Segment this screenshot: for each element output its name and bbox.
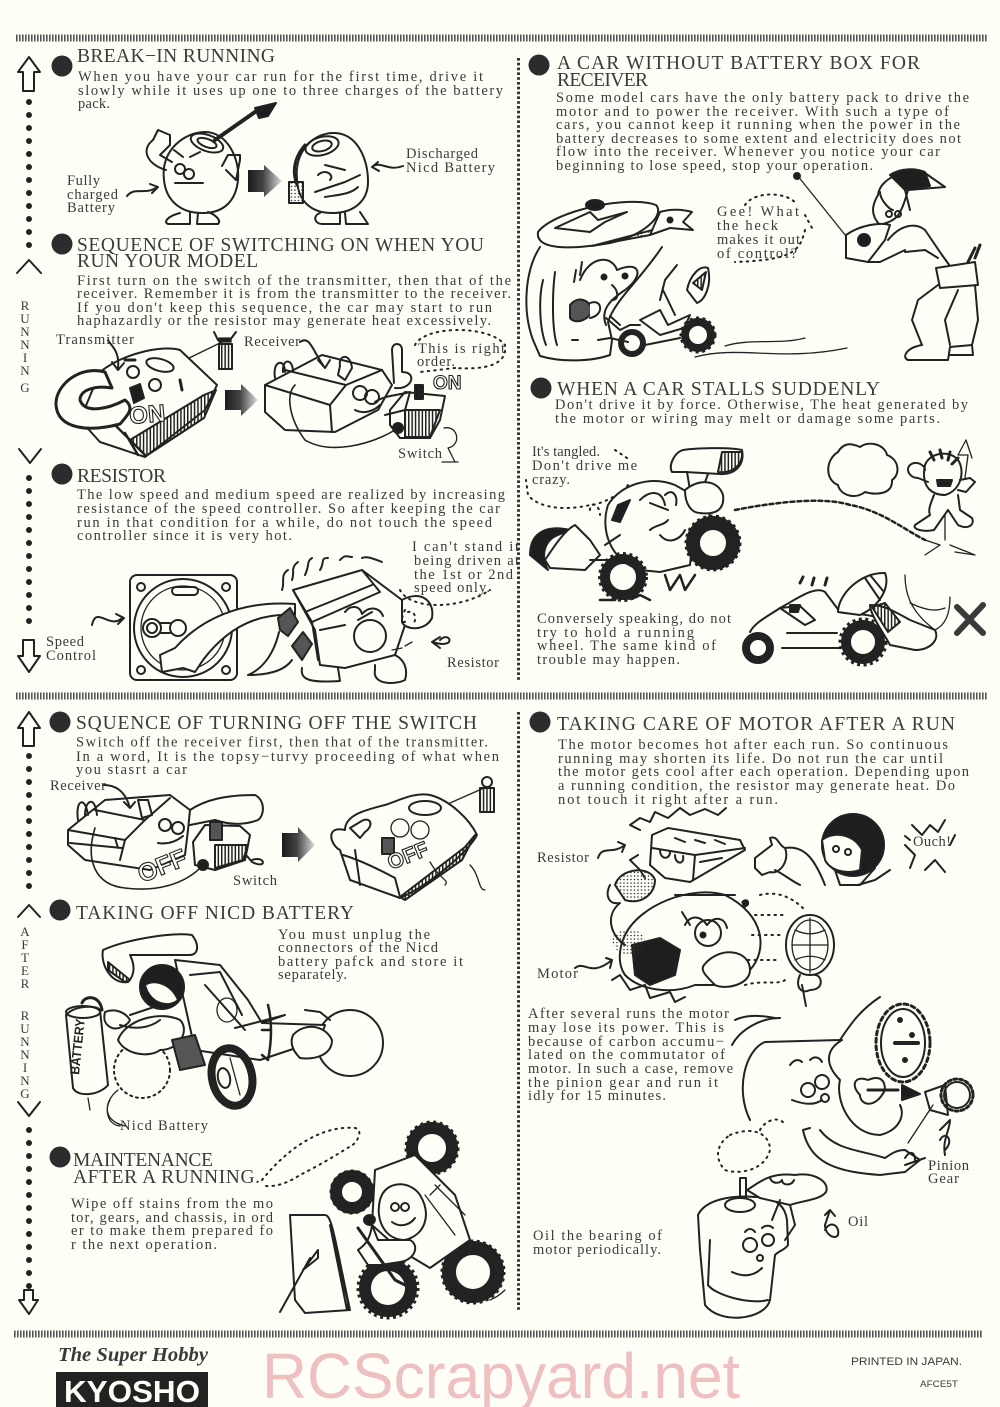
side marker: running — [17, 57, 41, 672]
hand-lettered labels: ON: ON — [433, 373, 462, 394]
labels: speed control and resistor: Speed — [46, 634, 85, 650]
side label letters: after running: G — [20, 1086, 30, 1101]
body: taking care of motor: The motor becomes hot after each run. So continuous — [558, 737, 948, 753]
labels: pinion gear: Gear — [928, 1171, 959, 1187]
labels: resistor motor ouch: Resistor — [537, 850, 589, 866]
body: after several runs: the pinion gear and run it — [528, 1075, 718, 1091]
body: car without battery box: battery decreases to some extent and electricity does not — [556, 131, 961, 147]
side label letters: running: G — [20, 380, 30, 395]
labels: transmitter receiver switch — [56, 332, 505, 462]
callout: tangled: crazy. — [532, 472, 570, 488]
body: after several runs — [528, 1006, 733, 1104]
body: conversely speaking: trouble may happen. — [537, 652, 680, 668]
body: after several runs: lated on the commutator of — [528, 1047, 725, 1063]
side label letters: after running: F — [21, 937, 29, 952]
body: when a car stalls — [555, 397, 969, 427]
illustration: hot resistor and driver — [575, 808, 955, 968]
heading: when a car stalls: WHEN A CAR STALLS SUDDENLY — [557, 379, 880, 400]
illustration: trash can, stalled car and driver — [526, 169, 980, 360]
side label letters: after running: N — [20, 1034, 30, 1049]
side label letters: running: U — [20, 311, 30, 326]
illustration: charged and discharged batteries — [127, 103, 403, 224]
callout: gee what the heck: the heck — [717, 218, 779, 234]
labels: speed control and resistor: Control — [46, 648, 96, 664]
illustration: speed controller and resistor — [92, 556, 490, 683]
callout: driven in first gear: the 1st or 2nd — [414, 567, 514, 583]
body: resistor: controller since it is very hot. — [77, 528, 292, 544]
side label letters: running: N — [20, 324, 30, 339]
hand-lettered labels: ON: ON — [128, 400, 166, 430]
body: taking off nicd — [278, 927, 463, 983]
labels: batteries: charged — [67, 187, 119, 203]
body: after several runs: idly for 15 minutes. — [528, 1088, 666, 1104]
label: nicd battery: Nicd Battery — [120, 1118, 209, 1134]
body: car without battery box: motor and to power the receiver. With such a type of — [556, 104, 949, 120]
body: turning off — [76, 734, 500, 778]
body: resistor: resistance of the speed controller. So after keeping the car — [77, 501, 500, 517]
body: break-in running: slowly while it uses up one to three charges of the battery — [78, 83, 504, 99]
body: car without battery box: cars, you cannot keep it running when the power in the — [556, 117, 960, 133]
side label letters: after running: A — [20, 924, 30, 939]
callout: driven in first gear: speed only. — [414, 580, 490, 596]
labels: pinion gear — [928, 1158, 970, 1187]
heading: sequence of switching on: SEQUENCE OF SWITCHING ON WHEN YOU — [77, 235, 484, 256]
body: taking care of motor: a running condition, the resistor may generate heat. Do — [558, 778, 955, 794]
body: car without battery box: Some model cars have the only battery pack to drive the — [556, 90, 969, 106]
labels: resistor motor ouch: Motor — [537, 966, 578, 982]
labels: speed control and resistor: Resistor — [447, 655, 499, 671]
label: battery on cell: BATTERY — [67, 1018, 88, 1075]
code: AFCE5T — [920, 1379, 959, 1389]
labels: speed control and resistor — [46, 634, 499, 671]
labels: receiver and switch: Switch — [233, 873, 278, 889]
body: conversely speaking: wheel. The same kind of — [537, 638, 716, 654]
body: conversely speaking — [537, 611, 731, 668]
body: car without battery box: beginning to lose speed, stop your operation. — [556, 158, 873, 174]
illustration: driver removing battery — [66, 934, 383, 1126]
side label letters: running: I — [23, 350, 27, 365]
labels: batteries: Nicd Battery — [406, 160, 496, 176]
side label letters: after running: N — [20, 1047, 30, 1062]
heading: sequence of switching on — [77, 235, 484, 272]
side label letters: running: R — [21, 298, 30, 313]
body: when a car stalls: Don't drive it by force. Otherwise, The heat generated by — [555, 397, 969, 413]
side label letters: running: N — [20, 337, 30, 352]
side label letters: after running — [20, 924, 30, 1101]
hand-lettered labels: OFF: OFF — [134, 844, 191, 889]
hand-lettered labels: OFF: OFF — [384, 838, 432, 875]
side label letters: after running: U — [20, 1021, 30, 1036]
callout: tangled — [532, 444, 637, 488]
callout: gee what the heck — [717, 204, 800, 262]
hand-lettered labels: OFF — [134, 838, 432, 889]
side label letters: after running: R — [21, 1008, 30, 1023]
body: break-in running — [78, 69, 504, 112]
body: when a car stalls: the motor or wiring may melt or damage some parts. — [555, 411, 940, 427]
body: taking off nicd: You must unplug the — [278, 927, 430, 943]
illustration: tangled car — [526, 440, 975, 600]
labels: transmitter receiver switch: Switch — [398, 446, 443, 462]
labels: batteries: Battery — [67, 200, 116, 216]
heading: taking care of motor: TAKING CARE OF MOTOR AFTER A RUN — [557, 714, 955, 735]
body: resistor — [77, 487, 505, 544]
heading: car without battery box: RECEIVER — [557, 70, 648, 91]
body: turning off: you stasrt a car — [76, 762, 187, 778]
body: maintenance: er to make them prepared fo — [71, 1223, 273, 1239]
heading: car without battery box — [557, 53, 920, 91]
callout: driven in first gear: being driven at — [414, 553, 519, 569]
side label letters: after running: T — [21, 950, 29, 965]
callout: driven in first gear: I can't stand it — [412, 539, 519, 555]
section: car without battery box — [526, 53, 980, 360]
body: sequence of switching on — [77, 273, 511, 329]
labels: resistor motor ouch: Ouch! — [913, 834, 951, 850]
side marker: after running — [18, 712, 40, 1314]
body: taking care of motor: not touch it right after a run. — [558, 792, 778, 808]
section: taking off nicd battery — [50, 900, 463, 1134]
side label letters: after running: R — [21, 976, 30, 991]
body: taking off nicd: separately. — [278, 967, 347, 983]
hand-lettered labels: ON — [128, 373, 461, 430]
body: oil the bearing: motor periodically. — [533, 1242, 661, 1258]
body: conversely speaking: try to hold a running — [537, 625, 694, 641]
body: after several runs: motor. In such a case, remove — [528, 1061, 733, 1077]
heading: car without battery box: A CAR WITHOUT BATTERY BOX FOR — [557, 53, 920, 74]
body: taking care of motor: the motor gets cool after each operation. Depending upon — [558, 764, 970, 780]
section: when a car stalls — [526, 378, 983, 668]
labels: batteries: Discharged — [406, 146, 479, 162]
illustration: pinion gear removal — [718, 997, 973, 1175]
labels: transmitter receiver switch: Receiver — [244, 334, 300, 350]
labels: receiver and switch: Receiver — [50, 778, 106, 794]
side label letters: after running: I — [23, 1060, 27, 1075]
heading: sequence of switching on: RUN YOUR MODEL — [77, 251, 258, 272]
illustration: hot motor and fan — [608, 870, 834, 1006]
body: maintenance: Wipe off stains from the mo — [71, 1196, 273, 1212]
body: sequence of switching on: receiver. Remember it is from the transmitter to the receiver. — [77, 286, 511, 302]
body: conversely speaking: Conversely speaking, do not — [537, 611, 731, 627]
body: sequence of switching on: haphazardly or the resistor may generate heat excessively. — [77, 313, 491, 329]
callout: gee what the heck: Gee! What — [717, 204, 799, 220]
side label letters: running: N — [20, 363, 30, 378]
side label letters: after running: N — [20, 1073, 30, 1088]
side label letters: after running: E — [21, 963, 29, 978]
body: maintenance — [71, 1196, 274, 1253]
callout: gee what the heck: of control? — [717, 246, 797, 262]
callout: gee what the heck: makes it out — [717, 232, 800, 248]
body: after several runs: because of carbon accumu− — [528, 1034, 724, 1050]
heading: resistor: RESISTOR — [77, 466, 166, 487]
body: taking off nicd: battery pafck and store it — [278, 954, 463, 970]
illustration: receiver off and transmitter off — [68, 777, 494, 900]
section: turning off the switch — [50, 712, 500, 900]
labels: transmitter receiver switch: This is right — [418, 341, 505, 357]
body: resistor: run in that condition for a while, do not touch the speed — [77, 515, 493, 531]
labels: transmitter receiver switch: order. — [417, 354, 455, 370]
body: after several runs: After several runs the motor — [528, 1006, 729, 1022]
body: maintenance: r the next operation. — [71, 1237, 217, 1253]
callout: driven in first gear — [412, 539, 519, 596]
label: oil: Oil — [848, 1214, 868, 1230]
heading: break-in running: BREAK−IN RUNNING — [77, 46, 275, 67]
printed in japan: PRINTED IN JAPAN. — [851, 1356, 962, 1368]
callout: tangled: Don't drive me — [532, 458, 637, 474]
illustration: cleaning the buggy — [262, 1122, 505, 1318]
body: car without battery box: flow into the receiver. Whenever you notice your car — [556, 144, 940, 160]
body: after several runs: may lose its power. This is — [528, 1020, 724, 1036]
labels: receiver and switch — [50, 778, 278, 889]
body: break-in running: When you have your car run for the first time, drive it — [78, 69, 483, 85]
body: sequence of switching on: First turn on the switch of the transmitter, then that of the — [77, 273, 511, 289]
labels: resistor motor ouch — [537, 834, 951, 982]
heading: maintenance: AFTER A RUNNING. — [73, 1167, 260, 1188]
callout: tangled: It's tangled. — [532, 444, 600, 460]
labels: batteries: Fully — [67, 173, 101, 189]
body: oil the bearing: Oil the bearing of — [533, 1228, 662, 1244]
section: sequence of switching on — [52, 234, 511, 462]
footer logo: the super hobby: The Super Hobby — [58, 1344, 208, 1366]
body: turning off: In a word, It is the topsy−turvy proceeding of what when — [76, 749, 500, 765]
labels: pinion gear: Pinion — [928, 1158, 970, 1174]
labels: transmitter receiver switch: Transmitter — [56, 332, 134, 348]
section: break-in running — [52, 46, 504, 224]
side label letters: running — [20, 298, 30, 395]
body: taking off nicd: connectors of the Nicd — [278, 940, 439, 956]
heading: taking off nicd: TAKING OFF NICD BATTERY — [76, 903, 354, 924]
heading: maintenance — [73, 1150, 260, 1188]
body: car without battery box — [556, 90, 969, 174]
section: taking care of motor — [528, 712, 973, 1318]
heading: maintenance: MAINTENANCE — [73, 1150, 213, 1171]
illustration: foot stopping wheel — [746, 573, 983, 665]
illustration: oiling the motor — [698, 1174, 838, 1318]
body: oil the bearing — [533, 1228, 662, 1258]
body: resistor: The low speed and medium speed are realized by increasing — [77, 487, 505, 503]
body: break-in running: pack. — [78, 96, 110, 112]
body: taking care of motor — [558, 737, 970, 808]
body: sequence of switching on: If you don't keep this sequence, the car may start to run — [77, 300, 493, 316]
section: maintenance — [50, 1122, 505, 1318]
labels: batteries — [67, 146, 496, 216]
illustration: transmitter and receiver — [56, 330, 505, 462]
heading: turning off: SQUENCE OF TURNING OFF THE SWITCH — [76, 713, 477, 734]
section: resistor — [46, 464, 519, 683]
body: turning off: Switch off the receiver first, then that of the transmitter. — [76, 734, 488, 750]
body: maintenance: tor, gears, and chassis, in ord — [71, 1210, 274, 1226]
body: taking care of motor: running may shorten its life. Do not run the car until — [558, 751, 943, 767]
